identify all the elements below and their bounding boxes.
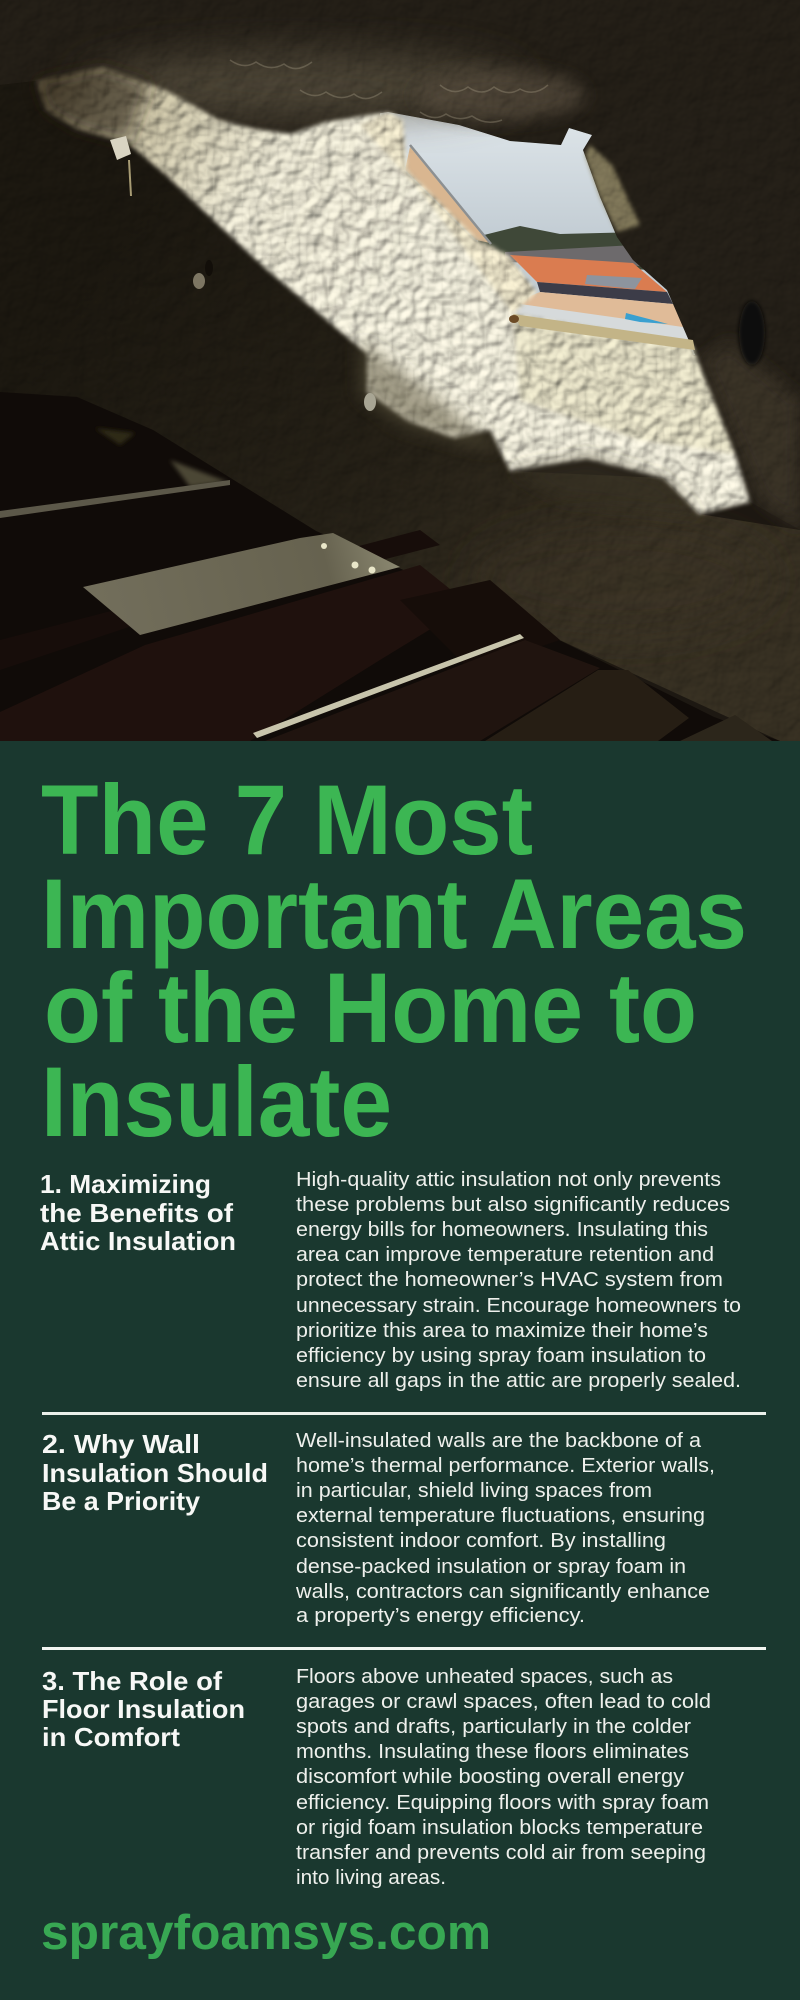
section 3 body: discomfort while boosting overall energy (296, 1766, 684, 1788)
bright foam insulation (36, 67, 750, 514)
foam shadow edges (36, 67, 150, 143)
section 3 body: efficiency. Equipping floors with spray foam (296, 1792, 709, 1814)
title: Important Areas (41, 858, 747, 969)
section 3 body: transfer and prevents cold air from seeping (296, 1842, 706, 1864)
wrap band above foam (513, 314, 695, 350)
section 3 heading: Floor Insulation (42, 1694, 245, 1724)
section 3 heading: 3. The Role of (42, 1666, 222, 1696)
section 2 heading (42, 1429, 268, 1516)
section 1 body: prioritize this area to maximize their home’s (296, 1320, 708, 1342)
section 1 body: protect the homeowner’s HVAC system from (296, 1269, 723, 1291)
section 1 heading: Attic Insulation (40, 1226, 236, 1256)
textured attic surfaces (68, 18, 800, 741)
section 3 heading (42, 1666, 245, 1752)
section 3 body: months. Insulating these floors eliminates (296, 1741, 689, 1763)
section 3 body: garages or crawl spaces, often lead to cold (296, 1691, 711, 1713)
dark green panel (0, 741, 800, 2000)
section 2 heading: Insulation Should (42, 1458, 268, 1488)
section 2 heading: Be a Priority (42, 1486, 201, 1516)
section 1 body: unnecessary strain. Encourage homeowners to (296, 1295, 741, 1317)
section 1 heading (40, 1169, 236, 1256)
section 2 body: external temperature fluctuations, ensuring (296, 1505, 705, 1527)
section 2 heading: 2. Why Wall (42, 1429, 200, 1459)
section 1 heading: 1. Maximizing (40, 1169, 211, 1199)
section 3 body (296, 1666, 711, 1889)
title: Insulate (41, 1046, 392, 1157)
section 2 body: consistent indoor comfort. By installing (296, 1530, 666, 1552)
section 2 body: Well-insulated walls are the backbone of a (296, 1430, 702, 1452)
section 1 heading: the Benefits of (40, 1198, 233, 1228)
section 1 body: efficiency by using spray foam insulation to (296, 1345, 706, 1367)
section 3 body: spots and drafts, particularly in the colder (296, 1716, 691, 1738)
left wall (302, 424, 800, 741)
section 1 body: area can improve temperature retention and (296, 1244, 714, 1266)
white strip (253, 634, 524, 738)
lit floor below joists (83, 533, 400, 635)
title (41, 764, 747, 1157)
section 1 body: High-quality attic insulation not only prevents (296, 1169, 721, 1191)
section 3 body: or rigid foam insulation blocks temperature (296, 1817, 703, 1839)
section 1 body (296, 1169, 741, 1392)
section 3 heading: in Comfort (42, 1722, 180, 1752)
section 2 body: home’s thermal performance. Exterior walls, (296, 1455, 715, 1477)
section 1 body: these problems but also significantly reduces (296, 1194, 730, 1216)
section 2 body: a property’s energy efficiency. (296, 1605, 585, 1627)
section 2 body: walls, contractors can significantly enhance (295, 1581, 710, 1603)
section 2 body (295, 1430, 715, 1627)
photo: spray foam in attic (0, 0, 800, 741)
footer website: sprayfoamsys.com (41, 1906, 491, 1960)
small foam details (509, 315, 519, 323)
ceiling foam (68, 18, 633, 145)
window view through attic opening (380, 105, 710, 355)
title: The 7 Most (41, 764, 533, 875)
dark lower attic and joists (0, 392, 780, 741)
section 2 body: dense-packed insulation or spray foam in (296, 1556, 686, 1578)
section 2 body: in particular, shield living spaces from (296, 1480, 652, 1502)
hole in right wall (739, 301, 765, 365)
section 1 body: energy bills for homeowners. Insulating this (296, 1219, 708, 1241)
right wall (583, 135, 790, 374)
title: of the Home to (44, 952, 697, 1063)
section 1 body: ensure all gaps in the attic are properly sealed. (296, 1370, 741, 1392)
section 3 body: Floors above unheated spaces, such as (296, 1666, 673, 1688)
section 3 body: into living areas. (296, 1867, 446, 1889)
ceiling scallop highlights (230, 60, 548, 122)
